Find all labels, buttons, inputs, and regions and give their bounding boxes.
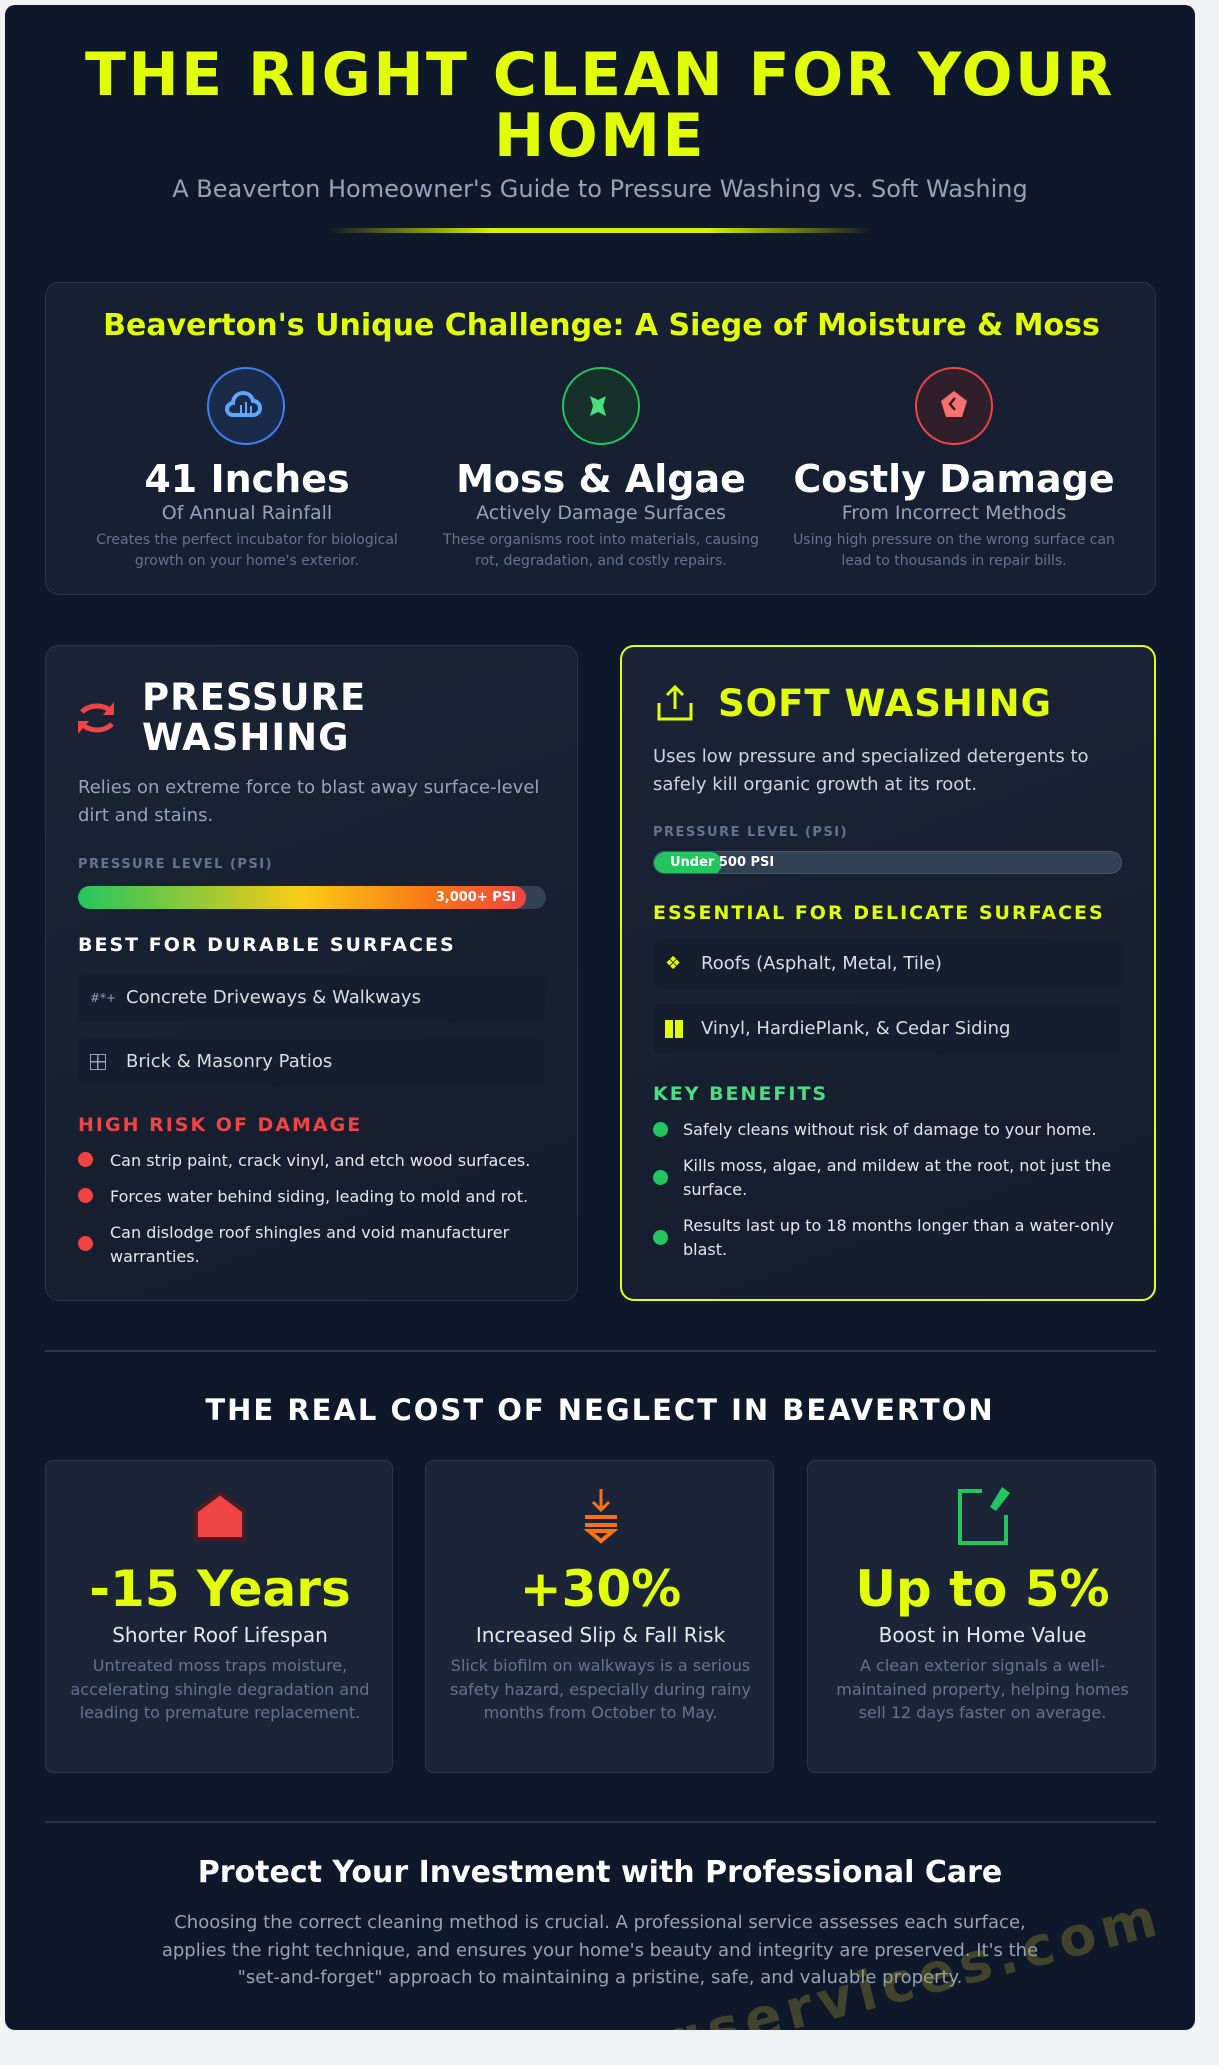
heading: durable: BEST FOR DURABLE SURFACES (78, 934, 456, 956)
stat: rainfall (96, 367, 398, 569)
cost card: value (807, 1460, 1156, 1773)
icon: edit (958, 1487, 1010, 1545)
stat: moss: Actively Damage Surfaces (476, 502, 726, 524)
description: Uses low pressure and specialized detergents to safely kill organic growth at its root. (653, 746, 1089, 795)
heading: protect: Protect Your Investment with Professional Care (198, 1855, 1002, 1890)
cost card: roof: Shorter Roof Lifespan (112, 1623, 328, 1647)
icon: arrows (78, 702, 114, 734)
cost card: slip: +30% (520, 1560, 681, 1618)
challenge heading: Beaverton's Unique Challenge: A Siege of Moisture & Moss (103, 308, 1100, 343)
cost card: slip (425, 1460, 774, 1773)
panel: soft washing: Results last up to 18 months longer than a water-only blast. (683, 1216, 1114, 1259)
stat: moss: These organisms root into materials, causing rot, degradation, and costly repairs. (443, 532, 759, 569)
subtitle: A Beaverton Homeowner's Guide to Pressure Washing vs. Soft Washing (172, 175, 1028, 203)
stat: moss: Moss & Algae (456, 457, 746, 501)
heading: WASHING (142, 716, 350, 759)
icon: slip (584, 1489, 618, 1544)
title: THE RIGHT CLEAN FOR YOUR (85, 40, 1115, 110)
cost card: value: A clean exterior signals a well-maintained property, helping homes sell 12 days faster on average. (836, 1656, 1129, 1722)
heading: SOFT WASHING (718, 682, 1052, 725)
bar chart: psi (78, 886, 546, 909)
stat: rainfall: Creates the perfect incubator for biological growth on your home's exterior. (96, 532, 398, 569)
label: PRESSURE LEVEL (PSI) (653, 825, 848, 840)
stat: damage: Costly Damage (793, 457, 1115, 501)
item: roofs: Roofs (Asphalt, Metal, Tile) (701, 953, 942, 974)
heading: risk: HIGH RISK OF DAMAGE (78, 1114, 362, 1136)
cost card: slip: Increased Slip & Fall Risk (476, 1623, 725, 1647)
panel: pressure washing (45, 645, 578, 1301)
label: PRESSURE LEVEL (PSI) (78, 857, 273, 872)
panel: challenge (45, 282, 1156, 595)
heading: cost of neglect: THE REAL COST OF NEGLECT IN BEAVERTON (205, 1393, 995, 1427)
item: concrete: #*+ (90, 991, 116, 1005)
cost card: roof: -15 Years (89, 1560, 351, 1618)
panel: soft washing: Safely cleans without risk of damage to your home. (683, 1120, 1096, 1139)
icon: moss (562, 367, 640, 445)
heading: benefits: KEY BENEFITS (653, 1083, 828, 1105)
text: conclusion: Choosing the correct cleaning method is crucial. A professional service assesses each surface, applies the right technique, and ensures your home's beauty and integrity are preserved. It's the "set-and-forget" approach to maintaining a pristine, safe, and valuable property. (162, 1912, 1038, 1988)
icon: house (194, 1491, 246, 1541)
list: benefits (653, 1120, 1114, 1259)
item: concrete: Concrete Driveways & Walkways (126, 987, 421, 1008)
heading (142, 676, 366, 759)
bar chart: psi: 3,000+ PSI (436, 890, 516, 905)
list: risks (78, 1151, 530, 1266)
cost card: slip: Slick biofilm on walkways is a serious safety hazard, especially during rainy months from October to May. (450, 1656, 751, 1722)
item: brick (78, 1038, 546, 1086)
panel: soft washing: Kills moss, algae, and mildew at the root, not just the surface. (683, 1156, 1111, 1199)
stat: damage: From Incorrect Methods (842, 502, 1066, 524)
heading: PRESSURE (142, 676, 366, 719)
icon: cloud rain (207, 367, 285, 445)
item: concrete (78, 974, 546, 1022)
bar chart: psi (653, 851, 1122, 874)
icon: damage (915, 367, 993, 445)
panel: pressure washing: Can strip paint, crack vinyl, and etch wood surfaces. (110, 1151, 530, 1170)
item: siding (653, 1004, 1122, 1054)
stat: moss (443, 367, 759, 569)
stat: rainfall: 41 Inches (144, 457, 350, 501)
icon: upload (658, 685, 692, 720)
stat: rainfall: Of Annual Rainfall (162, 502, 332, 524)
cost card: roof (45, 1460, 393, 1773)
accent line (329, 228, 871, 233)
item: siding: Vinyl, HardiePlank, & Cedar Siding (701, 1018, 1010, 1039)
cost card: value: Up to 5% (855, 1560, 1110, 1618)
item: roofs: ❖ (665, 953, 681, 974)
panel: pressure washing: Can dislodge roof shingles and void manufacturer warranties. (110, 1223, 509, 1266)
cost card: roof: Untreated moss traps moisture, accelerating shingle degradation and leading to premature replacement. (71, 1656, 369, 1722)
heading: delicate: ESSENTIAL FOR DELICATE SURFACES (653, 902, 1105, 924)
panel: pressure washing: Forces water behind siding, leading to mold and rot. (110, 1187, 528, 1206)
stat: damage (793, 367, 1115, 569)
cost card: value: Boost in Home Value (879, 1623, 1086, 1647)
title (85, 40, 1115, 171)
title: HOME (494, 101, 706, 171)
bar chart: psi: Under 500 PSI (670, 855, 774, 870)
panel: soft washing (620, 645, 1156, 1301)
item: roofs (653, 939, 1122, 989)
description: Relies on extreme force to blast away surface-level dirt and stains. (78, 777, 539, 826)
stat: damage: Using high pressure on the wrong surface can lead to thousands in repair bills. (793, 532, 1115, 569)
item: brick: Brick & Masonry Patios (126, 1051, 332, 1072)
